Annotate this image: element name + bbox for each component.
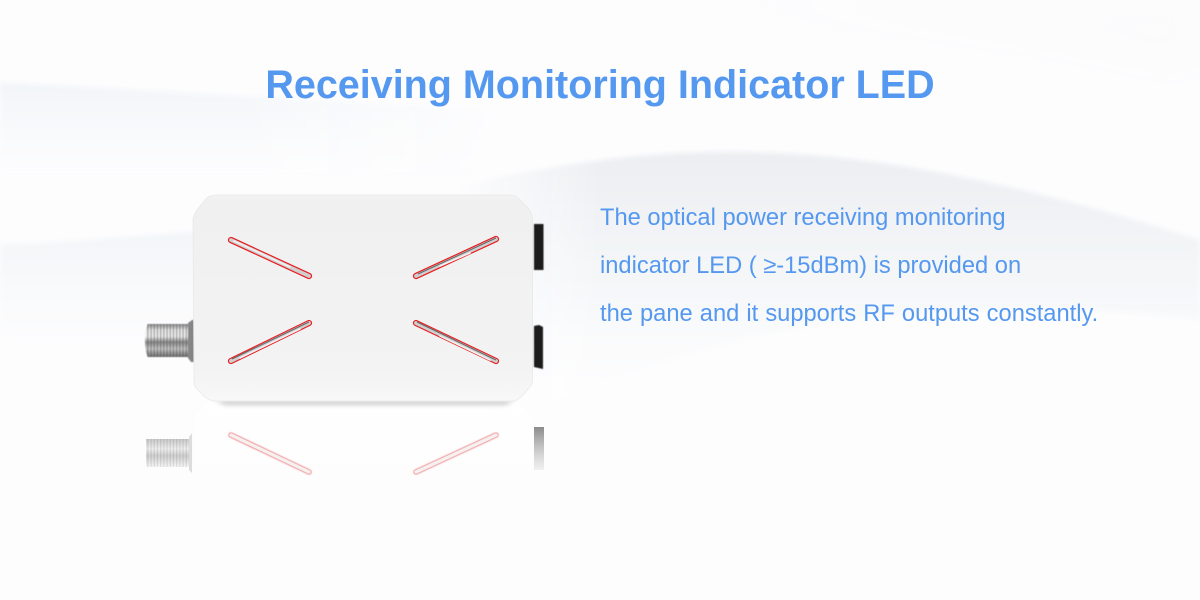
description text: The optical power receiving monitoring: [600, 205, 1006, 231]
contact shadow: [215, 401, 515, 405]
LED slots: [231, 238, 496, 361]
description text: indicator LED ( ≥-15dBm) is provided on: [600, 253, 1021, 279]
white housing: [193, 195, 532, 401]
title: Receiving Monitoring Indicator LED: [265, 63, 935, 107]
reflection: [146, 403, 544, 485]
description text: [600, 205, 1098, 327]
black side connectors: [534, 224, 544, 369]
F connector: [145, 320, 195, 362]
description text: the pane and it supports RF outputs constantly.: [600, 301, 1098, 327]
